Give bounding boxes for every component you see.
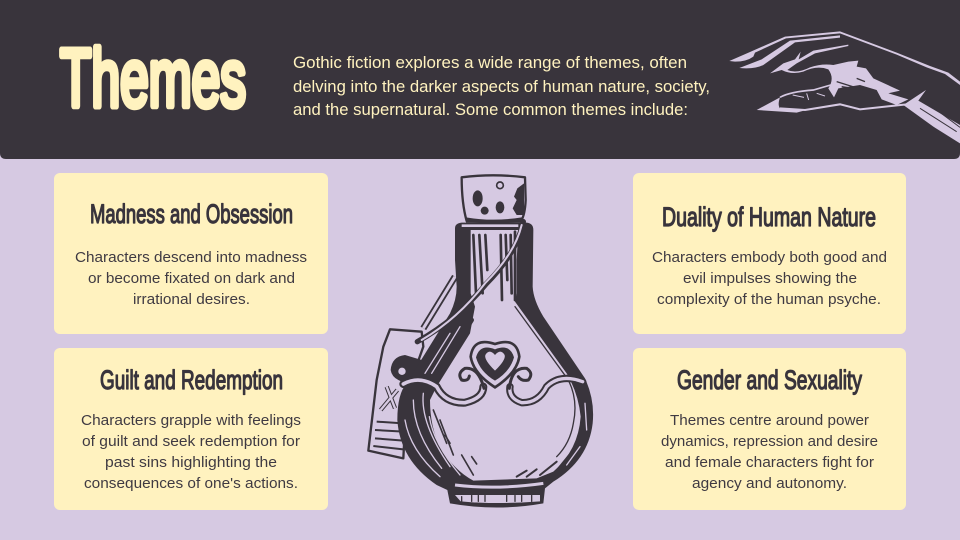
wall highlights (405, 327, 587, 501)
heart (471, 342, 519, 387)
description: agency and autonomy. (692, 476, 847, 492)
icon: skeletal hand (729, 31, 960, 143)
heading: Duality of Human Nature (662, 202, 876, 232)
ribbon label (403, 368, 583, 403)
description: Themes centre around power (670, 413, 869, 429)
intro text: and the supernatural. Some common themes include: (293, 101, 688, 119)
icon: potion bottle (368, 175, 593, 507)
description (661, 413, 878, 492)
intro text: Gothic fiction explores a wide range of themes, often (293, 54, 687, 72)
title: Themes (60, 33, 246, 124)
heading: Madness and Obsession (90, 199, 293, 229)
description: evil impulses showing the (683, 271, 857, 287)
panel: Duality of Human Nature (633, 173, 906, 334)
description: Characters descend into madness (75, 250, 307, 266)
description: irrational desires. (133, 292, 250, 308)
bottle glass (397, 223, 593, 507)
clear glass interior (430, 230, 581, 481)
header band (0, 0, 960, 159)
description (75, 250, 307, 308)
intro text: delving into the darker aspects of human nature, society, (293, 78, 710, 96)
heading: Gender and Sexuality (677, 365, 862, 395)
description (81, 413, 301, 492)
intro text (293, 54, 710, 119)
description: past sins highlighting the (105, 455, 277, 471)
description: dynamics, repression and desire (661, 434, 878, 450)
panel: Gender and Sexuality (633, 348, 906, 510)
description: consequences of one's actions. (84, 476, 298, 492)
description: of guilt and seek redemption for (82, 434, 300, 450)
description: Characters grapple with feelings (81, 413, 301, 429)
description: or become fixated on dark and (88, 271, 295, 287)
description: Characters embody both good and (652, 250, 887, 266)
string loop behind bottle (423, 277, 455, 328)
string (417, 222, 523, 342)
panel: Guilt and Redemption (54, 348, 328, 510)
heading: Guilt and Redemption (100, 365, 283, 395)
poison tag (368, 329, 423, 458)
description (652, 250, 887, 308)
panel: Madness and Obsession (54, 173, 328, 334)
rim and base highlights (462, 222, 518, 230)
description: and female characters fight for (665, 455, 874, 471)
description: complexity of the human psyche. (657, 292, 881, 308)
cork (462, 175, 526, 223)
glass shading (433, 232, 575, 477)
